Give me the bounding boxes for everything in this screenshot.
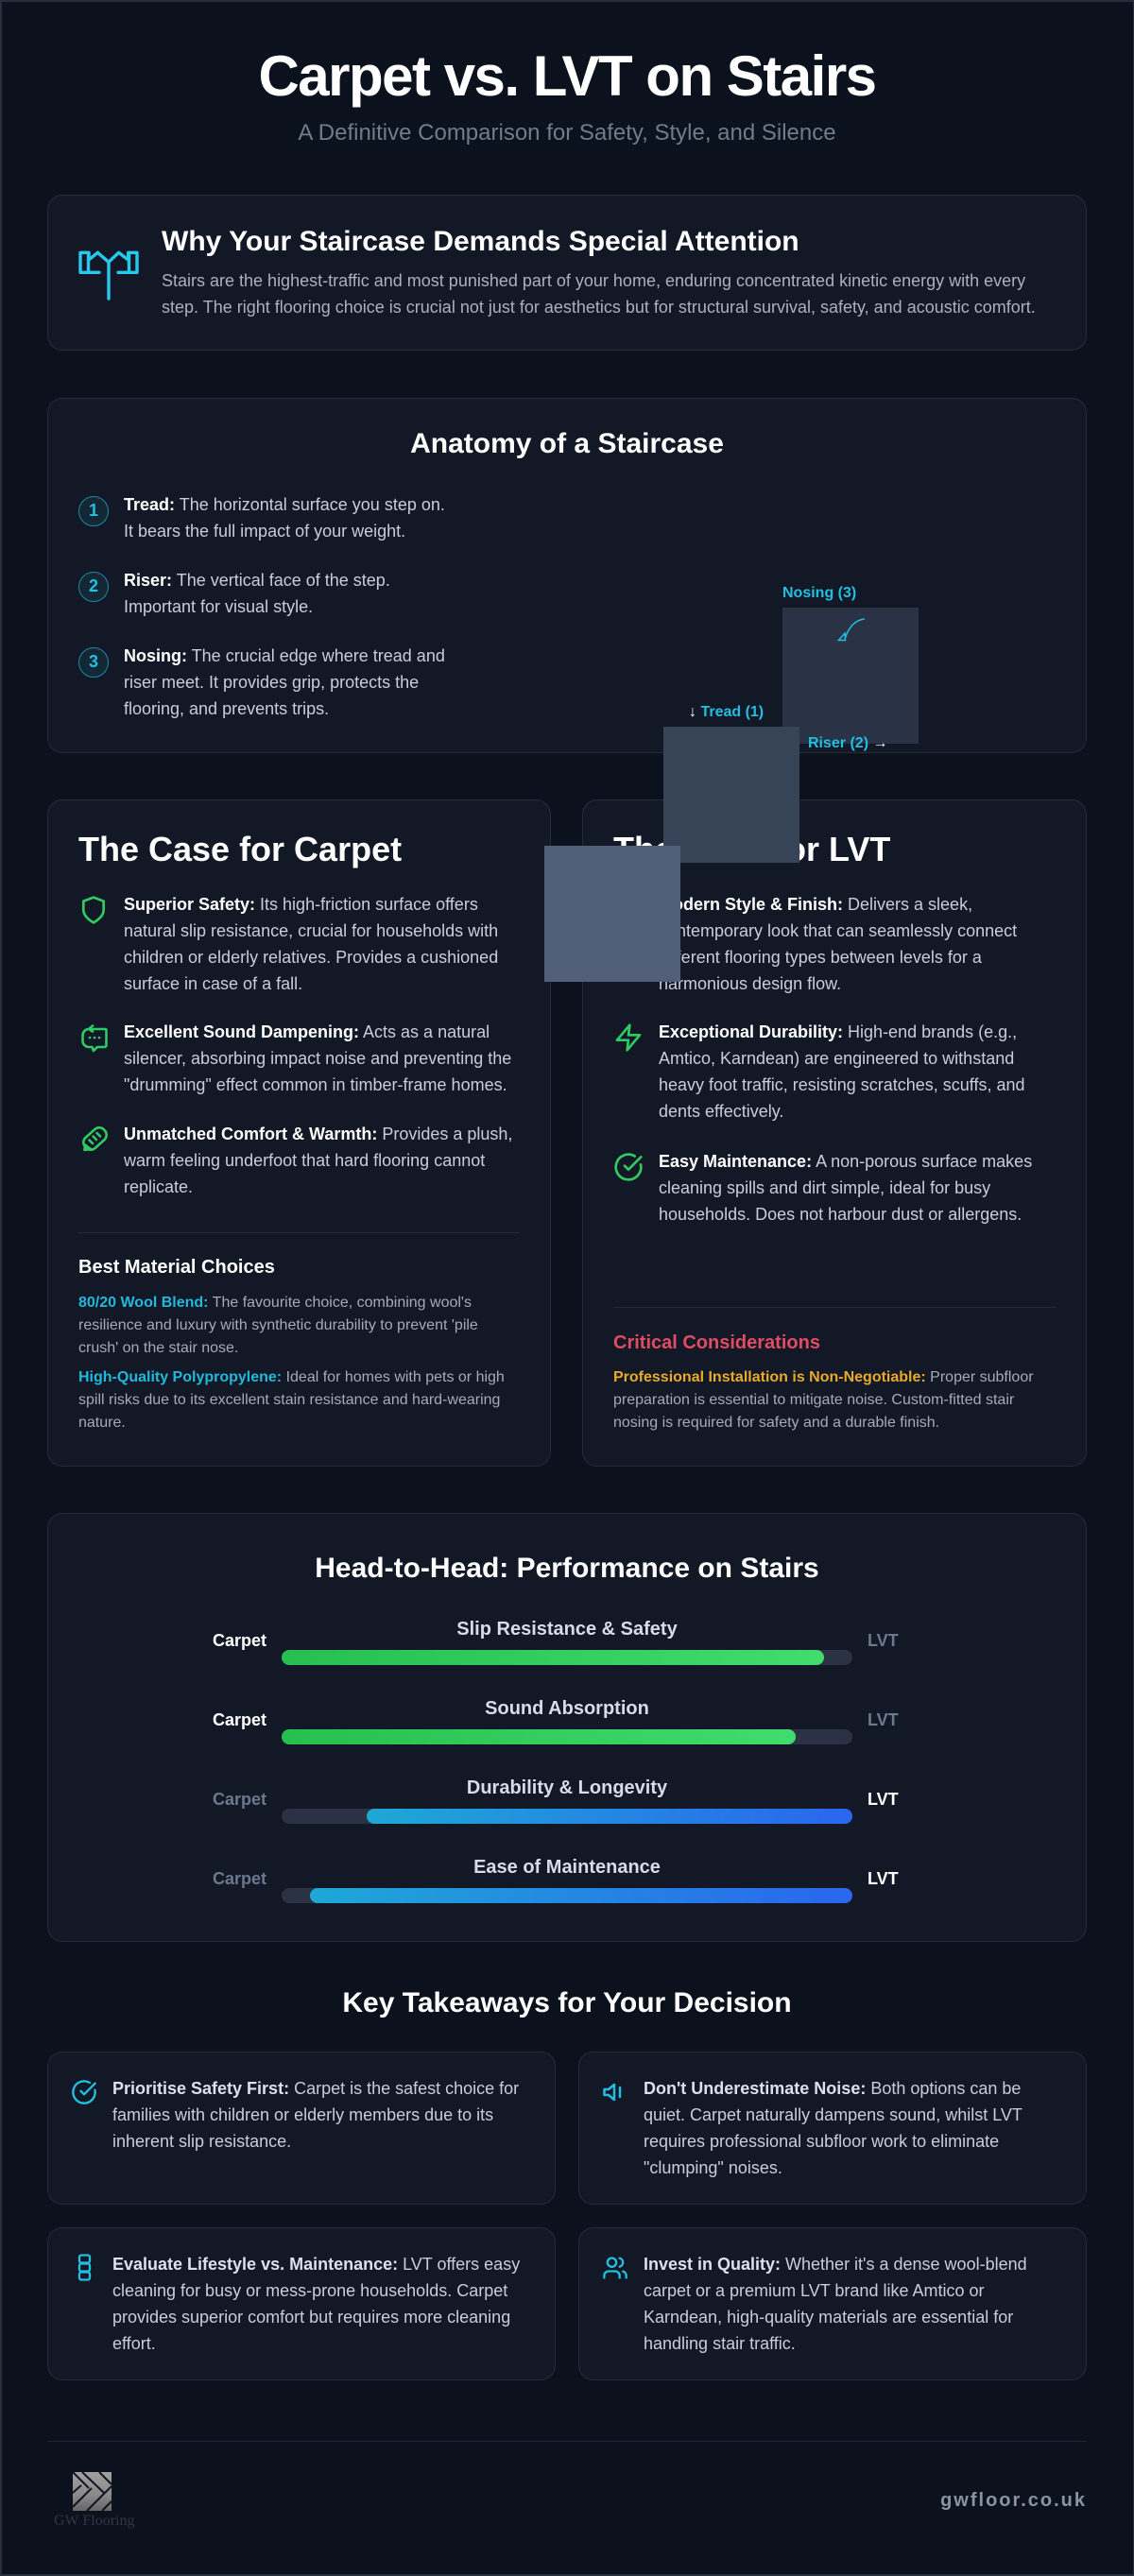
durability text: heavy foot traffic, resisting scratches, scuffs, and [659,1075,1025,1094]
text [644,2255,1027,2353]
nosing text: riser meet. It provides grip, protects the [124,673,419,692]
icon: check circle [72,2080,96,2104]
superior safety text [124,895,498,993]
text: Don't Underestimate Noise: Both options can be [644,2079,1021,2098]
text: quiet. Carpet naturally dampens sound, whilst LVT [644,2105,1022,2124]
easy maintenance text [659,1152,1032,1224]
metric row: ease of maintenance [213,1857,899,1903]
intro text: Stairs are the highest-traffic and most punished part of your home, enduring concentrated kinetic energy with every [162,271,1025,290]
nosing text: flooring, and prevents trips. [124,699,329,718]
heading: The Case for Carpet [78,830,402,868]
sound dampening text: silencer, absorbing impact noise and preventing the [124,1049,511,1068]
icon: comfort capsule [82,1126,108,1151]
metric row: slip resistance [213,1619,899,1665]
tread text: It bears the full impact of your weight. [124,522,405,541]
intro text: step. The right flooring choice is crucial not just for aesthetics but for structural survival, safety, and acoustic comfort. [162,298,1036,317]
logo [54,2472,134,2529]
nosing text: Nosing: The crucial edge where tread and [124,646,445,665]
polypropylene text: nature. [78,1415,126,1431]
text: provides superior comfort but requires more cleaning [112,2308,510,2327]
superior safety text: Superior Safety: Its high-friction surface offers [124,895,478,914]
heading: The Case for LVT [613,830,890,868]
superior safety text: surface in case of a fall. [124,974,302,993]
tread label: ↓ Tread (1) [689,704,764,720]
number 3 [78,647,109,678]
superior safety text: natural slip resistance, crucial for households with [124,921,498,940]
icon: speech bubble [81,1024,108,1053]
easy maintenance text: cleaning spills and dirt simple, ideal for busy [659,1178,990,1197]
heading: Head-to-Head: Performance on Stairs [315,1553,819,1584]
modern style text: harmonious design flow. [659,974,841,993]
wool blend text: resilience and luxury with synthetic durability to prevent 'pile [78,1317,478,1333]
nosing label: Nosing (3) [782,585,856,601]
text: "clumping" noises. [644,2158,782,2177]
icon: users [603,2257,627,2279]
icon: check circle [614,1153,643,1181]
icon: speaker [603,2083,622,2102]
text: effort. [112,2334,156,2353]
riser text [124,571,390,616]
metric row: sound absorption: LVT [868,1710,899,1729]
riser text: Important for visual style. [124,597,313,616]
icon: stacked blocks [77,2254,91,2281]
subtitle: A Definitive Comparison for Safety, Style, and Silence [298,120,836,146]
durability text: Exceptional Durability: High-end brands (e.g., [659,1022,1017,1041]
number 2 [78,572,109,602]
comfort text: warm feeling underfoot that hard flooring cannot [124,1151,485,1170]
nosing arrow [837,618,866,641]
metric row: sound absorption: Sound Absorption [485,1698,649,1719]
comfort text: Unmatched Comfort & Warmth: Provides a plush, [124,1125,512,1143]
text: carpet or a premium LVT brand like Amtico or [644,2281,984,2300]
stair diagram [544,585,919,982]
metric row: slip resistance: LVT [868,1631,899,1650]
comfort text: replicate. [124,1177,193,1196]
superior safety text: children or elderly relatives. Provides a cushioned [124,948,498,967]
durability text: dents effectively. [659,1102,783,1121]
modern style text: different flooring types between levels for a [659,948,982,967]
riser label: Riser (2) → [808,735,887,751]
tread text: Tread: The horizontal surface you step on. [124,495,445,514]
icon: lightning [616,1023,641,1052]
panel: anatomy of a staircase [47,398,1087,753]
metric row: durability: Carpet [213,1790,266,1809]
panel: head-to-head performance [47,1513,1087,1942]
durability text [659,1022,1025,1121]
metric row: durability: Durability & Longevity [467,1777,667,1798]
modern style text [659,895,1017,993]
text: Karndean, high-quality materials are essential for [644,2308,1013,2327]
icon: staircase fork [78,251,139,301]
panel: the case for carpet [47,799,551,1467]
riser text: Riser: The vertical face of the step. [124,571,390,590]
metric row: ease of maintenance: LVT [868,1869,899,1888]
number 2: 2 [89,576,98,595]
heading: key takeaways: Key Takeaways for Your Decision [342,1987,792,2018]
card: prioritise safety [47,2052,556,2205]
polypropylene text [78,1369,505,1431]
sound dampening text: "drumming" effect common in timber-frame homes. [124,1075,507,1094]
card: noise [578,2052,1087,2205]
text: Evaluate Lifestyle vs. Maintenance: LVT offers easy [112,2255,520,2274]
metric row: slip resistance: Carpet [213,1631,266,1650]
heading: Why Your Staircase Demands Special Attention [162,226,799,257]
text [644,2079,1022,2177]
text: Invest in Quality: Whether it's a dense wool-blend [644,2255,1027,2274]
durability text: Amtico, Karndean) are engineered to withstand [659,1049,1014,1068]
wool blend text: 80/20 Wool Blend: The favourite choice, combining wool's [78,1295,472,1311]
tread text [124,495,445,541]
polypropylene text: spill risks due to its excellent stain resistance and hard-wearing [78,1392,500,1408]
easy maintenance text: households. Does not harbour dust or allergens. [659,1205,1022,1224]
professional installation text: nosing is required for safety and a durable finish. [613,1415,939,1431]
comfort text [124,1125,512,1196]
polypropylene text: High-Quality Polypropylene: Ideal for homes with pets or high [78,1369,505,1385]
card: quality [578,2227,1087,2380]
material heading: Best Material Choices [78,1257,275,1278]
metric row: sound absorption: Carpet [213,1710,266,1729]
critical heading: Critical Considerations [613,1332,820,1353]
text: cleaning for busy or mess-prone households. Carpet [112,2281,507,2300]
icon: shield [82,896,105,924]
professional installation text: Professional Installation is Non-Negotiable: Proper subfloor [613,1369,1034,1385]
website: gwfloor.co.uk [940,2490,1087,2511]
metric row: sound absorption [213,1698,899,1744]
text: requires professional subfloor work to eliminate [644,2132,999,2151]
professional installation text: preparation is essential to mitigate noise. Custom-fitted stair [613,1392,1014,1408]
number 3: 3 [89,652,98,671]
number 1 [78,496,109,526]
wool blend text [78,1295,478,1356]
metric row: ease of maintenance: Ease of Maintenance [473,1857,661,1878]
sound dampening text [124,1022,511,1094]
panel: why your staircase demands special attention [47,195,1087,351]
number 1: 1 [89,501,98,520]
metric row: slip resistance: Slip Resistance & Safety [456,1619,678,1640]
text: Prioritise Safety First: Carpet is the safest choice for [112,2079,519,2098]
title: Carpet vs. LVT on Stairs [258,44,876,108]
easy maintenance text: Easy Maintenance: A non-porous surface makes [659,1152,1032,1171]
metric row: durability: LVT [868,1790,899,1809]
wool blend text: crush' on the stair nose. [78,1340,238,1356]
text: inherent slip resistance. [112,2132,291,2151]
professional installation text [613,1369,1034,1431]
text [112,2255,520,2353]
heading: Anatomy of a Staircase [410,428,724,459]
logo text: GW Flooring [54,2513,134,2529]
intro text [162,271,1036,317]
text: handling stair traffic. [644,2334,796,2353]
modern style text: contemporary look that can seamlessly connect [659,921,1017,940]
text [112,2079,519,2151]
panel: the case for lvt [582,799,1087,1467]
sound dampening text: Excellent Sound Dampening: Acts as a natural [124,1022,490,1041]
card: lifestyle [47,2227,556,2380]
modern style text: Modern Style & Finish: Delivers a sleek, [659,895,972,914]
nosing text [124,646,445,718]
metric row: ease of maintenance: Carpet [213,1869,266,1888]
metric row: durability [213,1777,899,1824]
text: families with children or elderly members due to its [112,2105,493,2124]
